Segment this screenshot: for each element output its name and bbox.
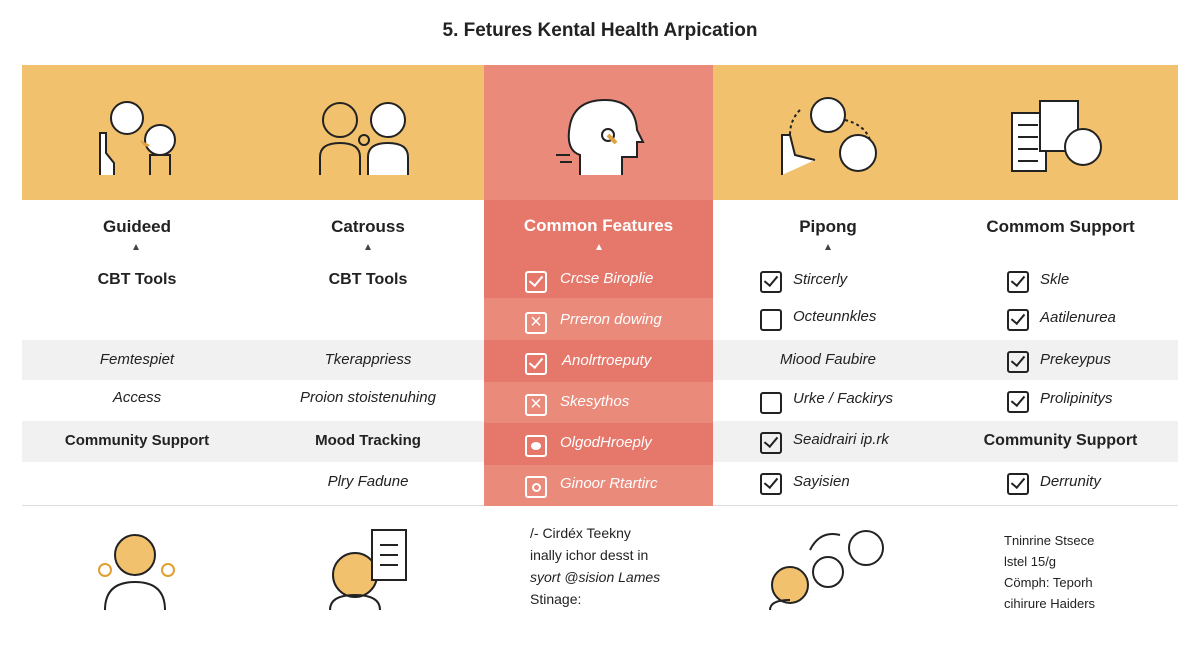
column 5 checklist: [984, 271, 1138, 495]
text: Mood Tracking: [315, 432, 421, 449]
column 2 text: [300, 271, 436, 490]
text: Skesythos: [560, 393, 629, 410]
column headers: Guideed: [103, 217, 171, 236]
text: Anolrtroeputy: [562, 352, 651, 369]
bottom text: right: [1004, 533, 1095, 611]
text: Plry Fadune: [328, 473, 408, 490]
text: Common Features: [524, 216, 673, 235]
bottom text: middle: [530, 525, 660, 607]
text: Prreron dowing: [560, 311, 662, 328]
text: Octeunnkles: [793, 308, 876, 325]
text: Skle: [1040, 271, 1069, 288]
text: Prekeypus: [1040, 351, 1111, 368]
gray row stripes: [22, 340, 1178, 380]
bottom icons: [98, 529, 884, 610]
column 1 text: [65, 271, 209, 449]
icons top: [99, 97, 1102, 175]
text: Stircerly: [793, 271, 847, 288]
text: Catrouss: [331, 217, 405, 236]
text: Prolipinitys: [1040, 390, 1113, 407]
top band: [22, 65, 1178, 200]
text: Commom Support: [986, 217, 1135, 236]
bottom text: middle: syort @sision Lames: [530, 569, 660, 585]
text: CBT Tools: [98, 271, 176, 288]
text: Community Support: [984, 432, 1137, 449]
column 4 checklist: [760, 271, 893, 495]
text: Urke / Fackirys: [793, 390, 893, 407]
panel: common features column: [484, 65, 713, 506]
title: 5. Fetures Kental Health Arpication: [442, 20, 757, 41]
text: Miood Faubire: [780, 351, 876, 368]
text: Sayisien: [793, 473, 850, 490]
text: Derrunity: [1040, 473, 1101, 490]
column 3 checklist: [525, 270, 662, 498]
text: Seaidrairi ip.rk: [793, 431, 889, 448]
text: Femtespiet: [100, 351, 174, 368]
bottom text: middle: Stinage:: [530, 591, 581, 607]
text: Pipong: [799, 217, 857, 236]
text: Aatilenurea: [1040, 309, 1116, 326]
bottom text: right: Cömph: Teporh: [1004, 575, 1093, 590]
text: Crcse Biroplie: [560, 270, 653, 287]
text: Access: [113, 389, 161, 406]
text: Community Support: [65, 432, 209, 449]
text: Tkerappriess: [325, 351, 411, 368]
bottom text: middle: /- Cirdéx Teekny: [530, 525, 631, 541]
bottom text: right: cihirure Haiders: [1004, 596, 1095, 611]
text: CBT Tools: [329, 271, 407, 288]
text: Proion stoistenuhing: [300, 389, 436, 406]
bottom text: right: lstel 15/g: [1004, 554, 1056, 569]
text: Ginoor Rtartirc: [560, 475, 658, 492]
text: OlgodHroeply: [560, 434, 652, 451]
bottom text: middle: inally ichor desst in: [530, 547, 648, 563]
bottom text: right: Tninrine Stsece: [1004, 533, 1094, 548]
